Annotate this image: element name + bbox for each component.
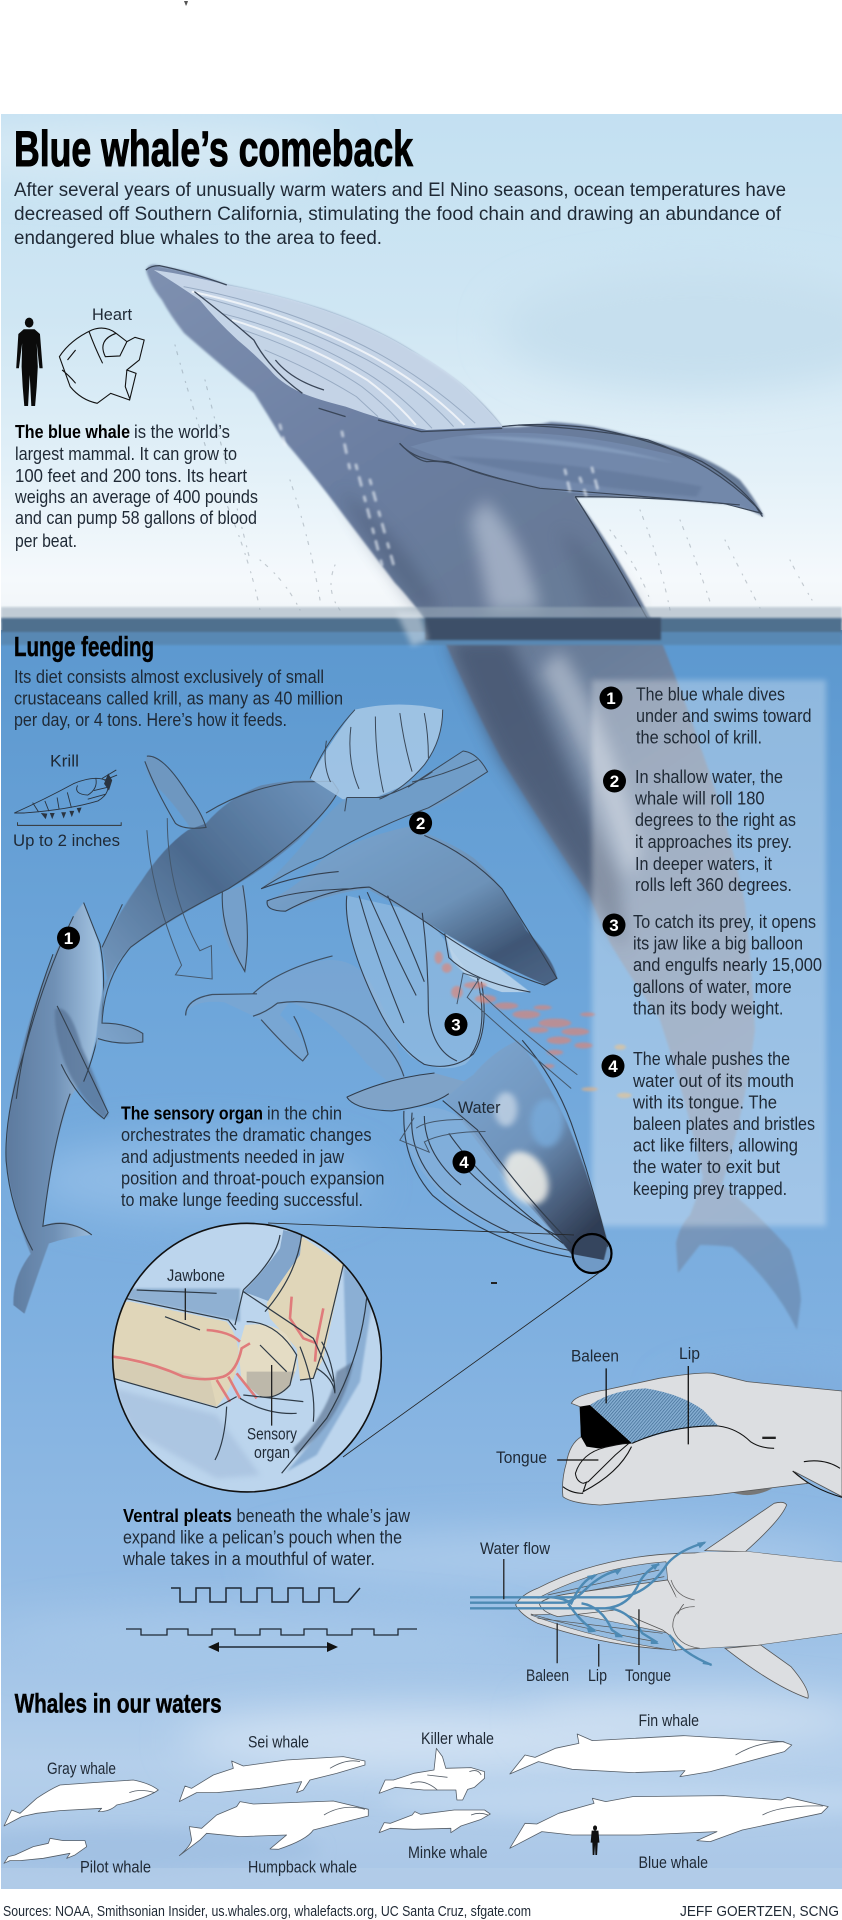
- detail circle labels: Sensory: [247, 1424, 297, 1444]
- flippers: [705, 1502, 808, 1698]
- sensory organ text: The sensory organ: [121, 1102, 263, 1124]
- whale 1: [6, 903, 103, 1314]
- water surface line: [1, 607, 842, 646]
- lunge feeding text: Its diet consists almost exclusively of small: [14, 666, 324, 687]
- krill labels: Up to 2 inches: [13, 831, 120, 850]
- step 4: the water to exit but: [633, 1156, 780, 1177]
- marker 3: 3: [451, 1016, 461, 1034]
- step 3: To catch its prey, it opens: [633, 911, 816, 932]
- step 1: under and swims toward: [636, 705, 812, 726]
- locator circle on chin: [572, 1234, 612, 1273]
- water droplets in the air: [175, 345, 812, 610]
- step 3: and engulfs nearly 15,000: [633, 954, 822, 975]
- pilot whale: [4, 1838, 87, 1863]
- whale name labels: Gray whale: [47, 1759, 116, 1778]
- step 1: 1: [606, 689, 616, 708]
- throat pleats: [146, 266, 762, 620]
- marker 2: 2: [416, 814, 425, 833]
- ventral pleats diagram: [126, 1588, 417, 1647]
- blue whale facts text: largest mammal. It can grow to: [15, 443, 237, 464]
- marker 4: [452, 1150, 476, 1174]
- step list: [600, 684, 822, 1199]
- intro text: After several years of unusually warm waters and El Nino seasons, ocean temperatures have: [14, 179, 786, 201]
- step 2: whale will roll 180: [634, 788, 765, 809]
- step 4: keeping prey trapped.: [633, 1178, 787, 1199]
- krill labels: [13, 752, 120, 850]
- step 3: [602, 911, 822, 1019]
- step 2: rolls left 360 degrees.: [635, 874, 792, 895]
- marker 4: 4: [459, 1153, 469, 1172]
- step 3: 3: [609, 916, 619, 935]
- detail circle labels: Jawbone: [167, 1266, 225, 1285]
- detail circle labels: [167, 1266, 297, 1462]
- whale name labels: Minke whale: [408, 1843, 488, 1862]
- diagram labels: [480, 1344, 700, 1685]
- sensory organ text: [121, 1102, 384, 1210]
- small whales: [4, 1734, 828, 1863]
- step 2: In deeper waters, it: [635, 853, 772, 874]
- diagram labels: Tongue: [625, 1666, 671, 1685]
- intro text: endangered blue whales to the area to feed.: [14, 227, 382, 249]
- whale name labels: Humpback whale: [248, 1858, 357, 1877]
- detail circle labels: organ: [254, 1443, 290, 1462]
- dark left shading: [448, 640, 625, 950]
- gray whale: [4, 1780, 158, 1826]
- illustration step markers: [57, 812, 476, 1174]
- step 2: In shallow water, the: [635, 766, 783, 787]
- baleen: [531, 1562, 676, 1651]
- dark blue tissue: [127, 1288, 240, 1322]
- flipper: [410, 433, 759, 512]
- blue whale facts text: and can pump 58 gallons of blood: [15, 507, 257, 528]
- cream bones: [113, 1302, 239, 1407]
- step 1: [600, 684, 812, 748]
- lunge feeding text: crustaceans called krill, as many as 40 million: [14, 688, 343, 708]
- ventral pleats text: Ventral pleats: [123, 1505, 232, 1526]
- step 2: it approaches its prey.: [635, 831, 792, 852]
- sensory organ text: in the chin: [267, 1102, 342, 1124]
- main breaching blue whale: [146, 265, 812, 1330]
- tiny mark at top of page: [184, 1, 188, 6]
- killer whale: [379, 1748, 485, 1800]
- tongue: [539, 1580, 686, 1640]
- sensory organ text: to make lunge feeding successful.: [121, 1189, 363, 1210]
- mouth top-view diagram with water flow: [470, 1502, 842, 1698]
- krill: [14, 770, 121, 825]
- marker 3: [444, 1013, 468, 1036]
- body outline: [668, 1552, 842, 1648]
- splash flecks on whale: [280, 425, 600, 570]
- heart label: Heart: [92, 305, 132, 324]
- whales in our waters heading: Whales in our waters: [15, 1689, 222, 1719]
- blue whale facts text: weighs an average of 400 pounds: [14, 486, 258, 507]
- step 4: act like filters, allowing: [633, 1135, 798, 1156]
- arrows: [147, 818, 577, 1152]
- step 4: water out of its mouth: [632, 1070, 794, 1091]
- sensory organ text: and adjustments needed in jaw: [121, 1146, 345, 1167]
- step 4: 4: [608, 1057, 618, 1076]
- icon: human for scale: [591, 1825, 599, 1855]
- marker 1: 1: [64, 929, 73, 948]
- diagram labels: Baleen: [526, 1666, 569, 1685]
- krill swarm: [435, 951, 632, 1098]
- icon: human: [16, 318, 43, 406]
- step 4: with its tongue. The: [632, 1092, 777, 1113]
- whale 3 tail behind: [186, 960, 408, 1099]
- translucent text backdrop panel: [592, 680, 826, 1226]
- diagram labels: Lip: [679, 1344, 700, 1363]
- whale 2b open mouth: [310, 705, 443, 799]
- step 3: gallons of water, more: [633, 976, 792, 997]
- intro text: [14, 179, 786, 249]
- step 1: the school of krill.: [636, 726, 762, 748]
- whale name labels: Killer whale: [421, 1729, 494, 1748]
- whale 3: [346, 896, 486, 1068]
- diagram labels: Water flow: [480, 1539, 551, 1558]
- blue whale facts text: is the world’s: [134, 421, 230, 442]
- sources and credit: Sources: NOAA, Smithsonian Insider, us.whales.org, whalefacts.org, UC Santa Cruz, sfgate.com: [3, 1904, 531, 1920]
- blue whale facts text: 100 feet and 200 tons. Its heart: [15, 465, 247, 486]
- step 4: The whale pushes the: [633, 1048, 790, 1069]
- arrow: expansion: [212, 1646, 333, 1648]
- lunge feeding text: [14, 666, 343, 730]
- fin whale: [510, 1734, 792, 1777]
- ventral pleats text: whale takes in a mouthful of water.: [122, 1548, 375, 1569]
- krill labels: Krill: [50, 752, 79, 770]
- intro text: decreased off Southern California, stimulating the food chain and drawing an abundance of: [14, 203, 782, 225]
- whale name labels: Blue whale: [638, 1853, 708, 1872]
- step 3: than its body weight.: [633, 998, 784, 1019]
- diagram labels: Baleen: [571, 1347, 619, 1366]
- whale 4: [445, 1040, 608, 1260]
- small stray mark: [491, 1282, 497, 1284]
- lunge feeding illustration: [6, 705, 632, 1314]
- blue whale facts text: The blue whale: [15, 421, 130, 442]
- step 2: [603, 766, 796, 895]
- vessels: [113, 1297, 323, 1402]
- step 1: The blue whale dives: [636, 684, 785, 705]
- human silhouette and heart: [16, 318, 144, 406]
- zoom connector lines: [268, 1223, 600, 1457]
- step 2: 2: [610, 772, 619, 791]
- detail circle: jawbone and sensory organ: [113, 1223, 381, 1492]
- marker 1: [57, 926, 80, 950]
- light centre streak: [540, 650, 640, 880]
- diagram labels: Tongue: [496, 1448, 547, 1467]
- diagram labels: Lip: [588, 1666, 607, 1685]
- sensory organ text: position and throat-pouch expansion: [121, 1168, 384, 1189]
- step 3: its jaw like a big balloon: [633, 932, 803, 954]
- whale body: [146, 265, 801, 1330]
- ventral pleats text: expand like a pelican’s pouch when the: [123, 1527, 402, 1548]
- whale 2 rising: [146, 756, 206, 830]
- step 2: degrees to the right as: [635, 809, 796, 830]
- blue whale: [510, 1796, 828, 1848]
- humpback whale: [179, 1801, 368, 1856]
- ventral pleats text: beneath the whale’s jaw: [236, 1505, 411, 1526]
- step 4: [602, 1048, 815, 1199]
- water label: Water: [458, 1098, 501, 1117]
- marker 2: [409, 812, 432, 834]
- ventral pleats text: [122, 1505, 411, 1569]
- whale name labels: Sei whale: [248, 1733, 309, 1752]
- blue whale facts text: [14, 421, 258, 551]
- blue whale facts text: per beat.: [15, 530, 77, 551]
- lip: [516, 1552, 842, 1650]
- sketch lines: [113, 1235, 367, 1473]
- lunge feeding heading: Lunge feeding: [14, 631, 154, 662]
- minke whale: [379, 1810, 490, 1833]
- title: Blue whale’s comeback: [14, 121, 413, 177]
- sei whale: [179, 1757, 365, 1802]
- whale name labels: Fin whale: [638, 1711, 699, 1730]
- step 4: baleen plates and bristles: [633, 1113, 815, 1134]
- mouth side-view diagram: [557, 1366, 842, 1505]
- whale name labels: [47, 1711, 708, 1877]
- icon: heart: [59, 328, 144, 403]
- flow arrows: [470, 1543, 712, 1665]
- sensory organ text: orchestrates the dramatic changes: [121, 1124, 372, 1145]
- whale name labels: Pilot whale: [80, 1858, 151, 1877]
- lunge feeding text: per day, or 4 tons. Here’s how it feeds.: [14, 709, 287, 730]
